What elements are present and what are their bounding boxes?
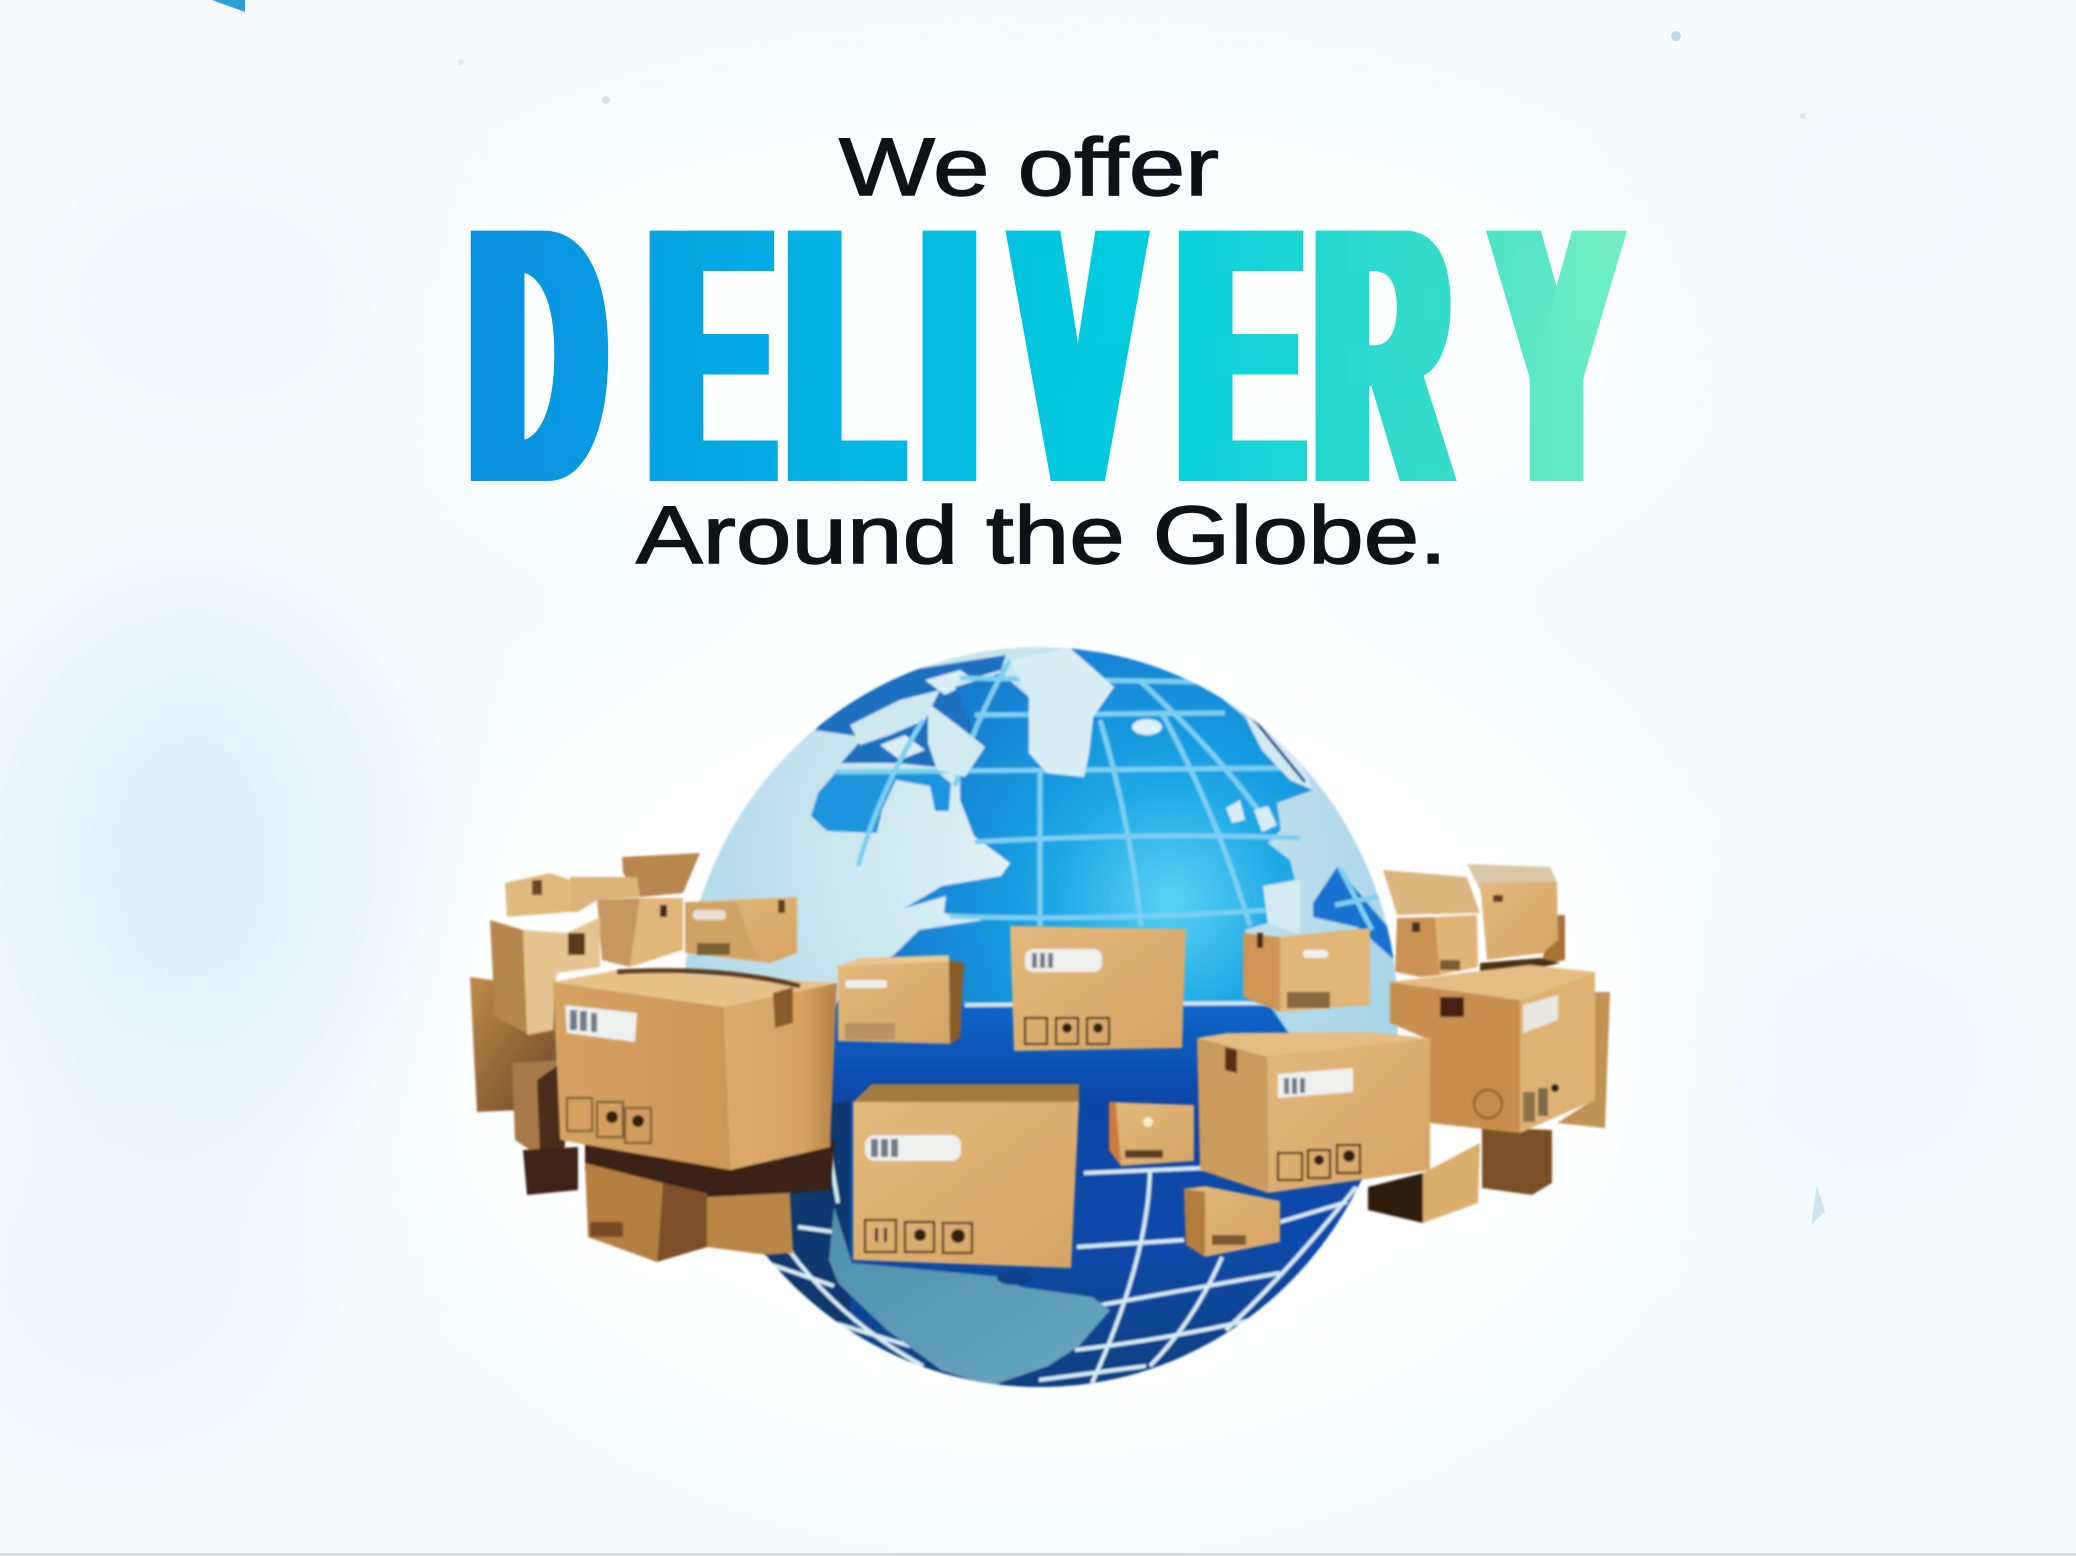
parcel: large center right with label and icons	[1197, 1032, 1430, 1193]
parcels: upper right cluster	[1383, 864, 1565, 977]
european strip	[928, 703, 985, 777]
shadow under large left parcel	[585, 1140, 835, 1200]
small eastern sea	[1313, 867, 1400, 965]
south america	[829, 1207, 1110, 1386]
greenland	[1010, 648, 1114, 777]
heading line: We offer: We offer	[839, 122, 1219, 213]
back-left parcels behind the globe	[470, 853, 700, 1195]
parcel: upper left small	[685, 897, 797, 963]
parcel: center small	[838, 955, 964, 1044]
parcel: lower left	[585, 1163, 707, 1262]
globe	[680, 647, 1400, 1400]
southern deep ocean	[766, 1004, 1362, 1388]
main ocean	[766, 647, 1362, 1388]
north-east land strip	[1245, 717, 1313, 790]
heading word: DELIVERY: DELIVERY	[473, 152, 1616, 558]
heading line: Around the Globe.: Around the Globe.	[636, 490, 1447, 581]
parcel: top right	[1243, 928, 1370, 1012]
northern speckled waters	[815, 655, 1006, 770]
upper grid	[836, 660, 1388, 930]
title text	[473, 122, 1616, 581]
parcel: large left with label and icons	[553, 970, 837, 1170]
parcels: far-right lower	[1368, 1127, 1552, 1223]
parcel: large right	[1390, 965, 1610, 1133]
iceland and islands	[1132, 719, 1162, 735]
top-left corner shard	[212, 0, 245, 12]
parcel: top center	[1010, 926, 1186, 1051]
parcel: lower center right	[1184, 1186, 1280, 1257]
parcel: lower left small	[707, 1193, 793, 1255]
left mid ocean patch	[811, 772, 951, 833]
parcel: large front center	[853, 1084, 1079, 1268]
parcel: small center right	[1109, 1102, 1194, 1166]
land notch on the right	[1263, 880, 1300, 935]
lower grid	[767, 1003, 1356, 1383]
sphere and pale land	[682, 647, 1398, 1387]
parcels in front of the globe	[553, 864, 1610, 1268]
